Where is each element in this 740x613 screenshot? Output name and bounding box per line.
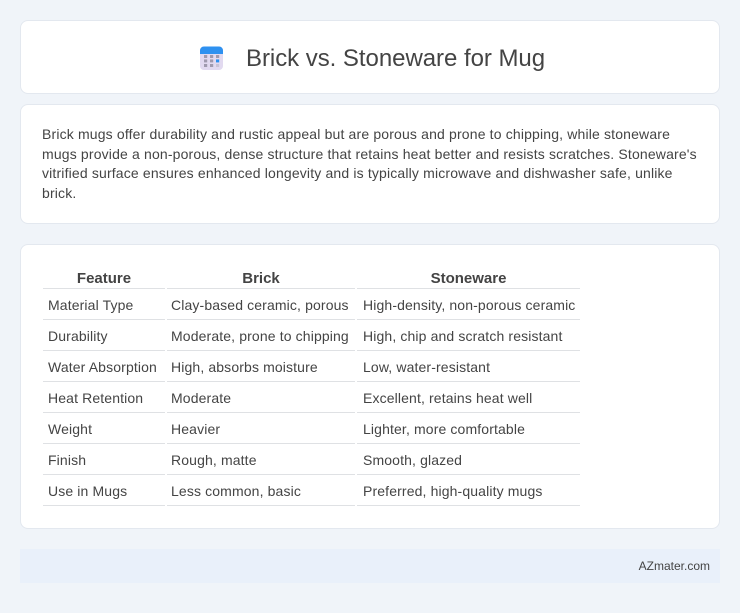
row: Use in Mugs: [48, 483, 543, 499]
row: Weight: Heavier: [171, 421, 220, 437]
row: Use in Mugs: Use in Mugs: [48, 483, 127, 499]
row: Water Absorption: [48, 359, 490, 375]
row: Water Absorption: High, absorbs moisture: [171, 359, 318, 375]
summary paragraph: Brick mugs offer durability and rustic appeal but are porous and prone to chipping, while stoneware: [42, 126, 670, 142]
row: Water Absorption: Low, water-resistant: [363, 359, 490, 375]
table header: [77, 270, 506, 287]
row: Durability: Moderate, prone to chipping: [171, 328, 349, 344]
table header: Feature: [77, 270, 131, 287]
row: Material Type: High-density, non-porous ceramic: [363, 297, 575, 313]
row: Durability: High, chip and scratch resistant: [363, 328, 562, 344]
row: Use in Mugs: Less common, basic: [171, 483, 301, 499]
row: Use in Mugs: Preferred, high-quality mugs: [363, 483, 543, 499]
footer bar: [20, 549, 720, 583]
icon: calendar: [200, 46, 223, 70]
row: Material Type: Clay-based ceramic, porous: [171, 297, 349, 313]
panel: summary text: [20, 104, 720, 224]
row: Durability: Durability: [48, 328, 108, 344]
row: Material Type: Material Type: [48, 297, 133, 313]
row: Heat Retention: Excellent, retains heat well: [363, 390, 532, 406]
footer credit: AZmater.com: [639, 559, 710, 573]
row: Heat Retention: Heat Retention: [48, 390, 143, 406]
summary paragraph: [42, 126, 697, 201]
row: Weight: Weight: [48, 421, 92, 437]
row: Material Type: [48, 297, 575, 313]
row: Finish: Finish: [48, 452, 86, 468]
row: Heat Retention: [48, 390, 532, 406]
row: Heat Retention: Moderate: [171, 390, 231, 406]
panel: comparison table: [20, 244, 720, 529]
row: Water Absorption: Water Absorption: [48, 359, 157, 375]
table header: Brick: [242, 270, 280, 287]
summary paragraph: vitrified surface ensures enhanced longevity and is typically microwave and dishwasher safe, unlike: [42, 165, 673, 181]
row: Finish: Rough, matte: [171, 452, 257, 468]
row: Weight: [48, 421, 525, 437]
table header: Stoneware: [431, 270, 506, 287]
summary paragraph: brick.: [42, 185, 76, 201]
row: Finish: Smooth, glazed: [363, 452, 462, 468]
title: Brick vs. Stoneware for Mug: [246, 45, 545, 72]
row: Durability: [48, 328, 562, 344]
row: Weight: Lighter, more comfortable: [363, 421, 525, 437]
row: Finish: [48, 452, 462, 468]
summary paragraph: mugs provide a non-porous, dense structure that retains heat better and resists scratches. Stoneware's: [42, 146, 697, 162]
panel: title card: [20, 20, 720, 94]
